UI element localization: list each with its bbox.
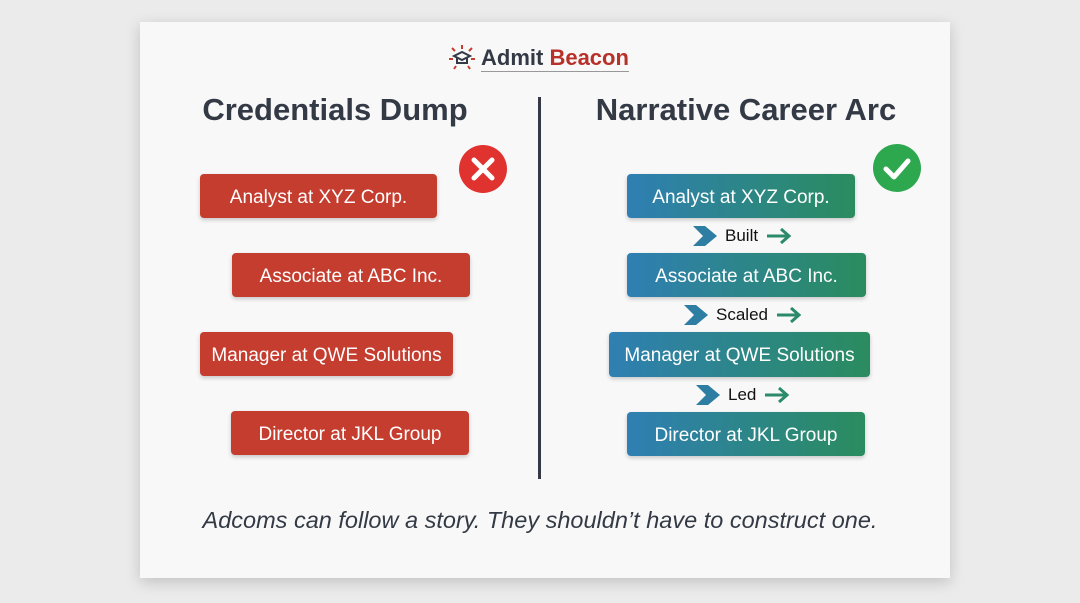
box: analyst (627, 174, 855, 218)
box: director: Director at JKL Group (654, 424, 838, 446)
box: director (627, 412, 865, 456)
box: manager: Manager at QWE Solutions (624, 345, 855, 366)
right list (607, 174, 872, 460)
connector: built: Built (725, 226, 758, 245)
box: analyst (200, 174, 437, 218)
divider (538, 97, 541, 479)
connector: led: Led (728, 385, 756, 404)
box: manager (609, 332, 870, 377)
box: analyst: Analyst at XYZ Corp. (652, 186, 830, 208)
box: manager: Manager at QWE Solutions (211, 344, 442, 366)
left list (198, 174, 472, 459)
box: associate (232, 253, 470, 297)
box: associate (627, 253, 866, 297)
box: director: Director at JKL Group (258, 424, 442, 444)
connector: scaled (684, 305, 802, 325)
connector: led (696, 385, 790, 405)
heading: narrative career arc: Narrative Career Arc (596, 92, 896, 127)
box: associate: Associate at ABC Inc. (655, 266, 838, 286)
connector: built (693, 226, 792, 246)
box: manager (200, 332, 453, 376)
card background (140, 22, 950, 578)
box: analyst: Analyst at XYZ Corp. (230, 186, 407, 208)
box: associate: Associate at ABC Inc. (260, 266, 442, 286)
icon: red x (459, 145, 507, 193)
logo: Admit Beacon (481, 44, 629, 70)
tagline: Adcoms can follow a story. They shouldn’t have to construct one. (203, 507, 877, 533)
heading: credentials dump: Credentials Dump (202, 92, 468, 127)
connector: scaled: Scaled (716, 305, 768, 324)
icon: green check (873, 144, 921, 192)
box: director (231, 411, 469, 455)
